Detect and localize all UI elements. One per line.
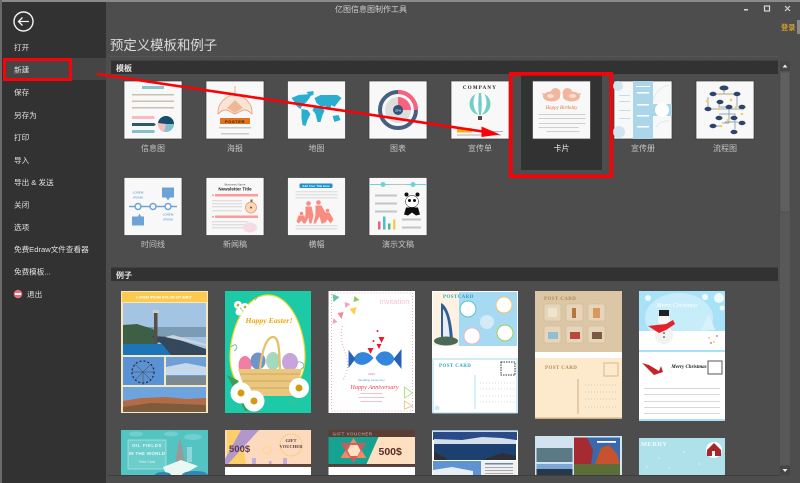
- template: newsletter: Business Name: [224, 182, 246, 186]
- template: map: 地图: [308, 143, 324, 153]
- example: blue postcard: POSTCARD: [443, 295, 474, 300]
- panel: left sidebar: [2, 2, 106, 483]
- example: oil fields card: [121, 430, 208, 479]
- menu item: 打开: [14, 42, 30, 52]
- example: gift voucher peach: VOUCHER: [280, 444, 303, 449]
- example: tan postcard: POST CARD: [545, 366, 577, 371]
- example: anniversary invitation: Wedding Ceremony: [358, 378, 385, 382]
- template: timeline: LOREM: [163, 212, 174, 216]
- template: flyer: [451, 81, 509, 153]
- example: travel poster: LOREM IPSUM DOLOR SIT AMET: [136, 296, 193, 300]
- panel: example thumbnails: [121, 291, 725, 479]
- template: banner: 横幅: [308, 239, 324, 249]
- bottom border line: [107, 475, 780, 476]
- section header: templates: 模板: [116, 63, 132, 73]
- template: card (selected): [532, 81, 590, 153]
- example: autumn postcard: [535, 436, 622, 476]
- selected item highlight: [3, 58, 106, 80]
- example: gift voucher peach: GIFT: [285, 438, 297, 443]
- template: timeline: 时间线: [141, 239, 165, 249]
- template: timeline: [124, 178, 182, 249]
- menu item: 打印: [14, 132, 29, 142]
- highlight: red box around card template: [511, 74, 611, 176]
- scrollbar: [780, 61, 790, 476]
- template: card (selected): Happy Birthday: [544, 106, 578, 111]
- menu item: 选项: [14, 222, 30, 232]
- template: presentation: [369, 178, 427, 249]
- template: map: [288, 81, 346, 153]
- menu item: 导出 & 发送: [14, 177, 54, 187]
- section header: templates: [111, 60, 778, 74]
- template: infographic: 信息图: [141, 143, 165, 153]
- template: newsletter: Newsletter Title: [218, 186, 252, 192]
- menu item: 另存为: [14, 110, 37, 120]
- section header: examples: [111, 268, 778, 281]
- example: merry card: MERRY: [641, 441, 667, 448]
- page heading: 预定义模板和例子: [110, 38, 217, 53]
- menu item: 保存: [14, 87, 30, 97]
- example: travel poster: [121, 291, 208, 413]
- template: card (selected): 卡片: [554, 143, 570, 153]
- menu item: 免费模板...: [14, 266, 51, 276]
- example: Christmas postcard: [639, 291, 725, 421]
- template: newsletter: 新闻稿: [223, 239, 247, 249]
- template: banner: [288, 178, 346, 249]
- template: flyer: COMPANY: [463, 86, 497, 91]
- example: anniversary invitation: [328, 291, 415, 413]
- template: presentation: 演示文稿: [382, 239, 414, 249]
- example: blue postcard: [432, 291, 518, 413]
- example: lake postcard: [432, 430, 518, 476]
- template: poster: 海报: [227, 143, 243, 153]
- example: Christmas postcard: Merry Christmas: [670, 365, 707, 370]
- example: anniversary invitation: Happy Anniversary: [349, 384, 399, 391]
- template: timeline: IPSUM: [163, 218, 173, 222]
- template: poster: POSTER: [225, 119, 245, 124]
- template: chart: [369, 81, 427, 153]
- arrow: from new menu to card template: [97, 74, 500, 137]
- example: Easter card: [225, 291, 311, 413]
- menu item: 退出: [27, 289, 42, 299]
- template: banner: Add Your Title Here: [302, 184, 330, 188]
- template: timeline: IPSUM: [133, 196, 143, 200]
- template: chart: 图表: [390, 143, 406, 153]
- menu item: 关闭: [14, 200, 29, 210]
- template: poster: [206, 81, 264, 153]
- example: blue postcard: POST CARD: [439, 364, 471, 369]
- example: gift voucher peach: [225, 430, 311, 476]
- template: timeline: LOREM: [133, 190, 144, 194]
- selected card background: [521, 75, 602, 170]
- menu item: 导入: [14, 156, 30, 165]
- example: gift voucher teal: [328, 430, 415, 476]
- icon: exit: [14, 290, 22, 298]
- example: Easter card: Happy Easter!: [244, 316, 292, 325]
- highlight: red box around new menu item: [4, 60, 70, 80]
- window title: 亿图信息图制作工具: [335, 4, 407, 14]
- template: infographic: [124, 81, 182, 153]
- sign-in link: 登录: [781, 23, 795, 32]
- example: oil fields card: OIL FIELDS: [132, 443, 162, 448]
- example: gift voucher teal: 500$: [378, 446, 402, 458]
- menu item: 新建: [14, 64, 30, 74]
- template: flyer: 宣传单: [468, 143, 492, 153]
- template: brochure: [613, 81, 672, 153]
- example: tan postcard: POST CARD: [544, 297, 576, 302]
- example: anniversary invitation: 2013: [368, 372, 375, 376]
- example: merry card: [639, 438, 725, 476]
- template: brochure: 宣传册: [631, 143, 655, 153]
- example: gift voucher teal: GIFT VOUCHER: [332, 432, 373, 436]
- example: Christmas postcard: Merry Christmas: [655, 303, 698, 309]
- example: oil fields card: IN THE WORLD: [129, 451, 166, 456]
- example: gift voucher peach: 500$: [229, 444, 251, 455]
- example: tan postcard: [535, 291, 622, 419]
- icon: back arrow: [14, 12, 33, 31]
- section header: examples: 例子: [116, 270, 132, 280]
- example: anniversary invitation: Invitation: [379, 297, 410, 306]
- example: oil fields card: Free Card: [139, 460, 155, 464]
- template: flowchart: 流程图: [713, 143, 737, 153]
- template: newsletter: [206, 178, 264, 249]
- template: chart: 25%: [395, 108, 401, 112]
- menu item: 免费Edraw文件查看器: [14, 244, 89, 254]
- template: flowchart: [696, 81, 754, 153]
- window controls: [744, 6, 790, 11]
